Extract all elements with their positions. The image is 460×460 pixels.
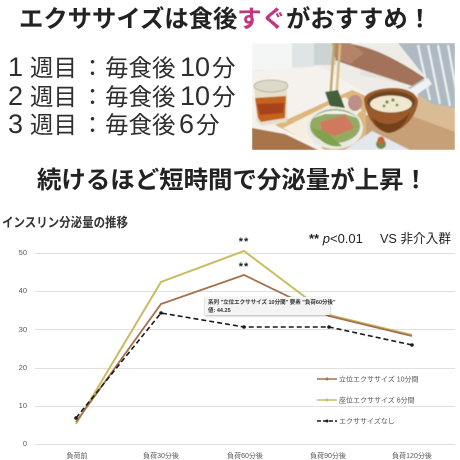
significance asterisks upper: ** — [239, 236, 249, 248]
significance note — [309, 231, 451, 246]
y axis labels: 0 — [23, 439, 27, 448]
tooltip: 系列 "立位エクササイズ 10分間" 要素 "負荷60分後" — [208, 298, 336, 306]
legend: none: エクササイズなし — [339, 416, 395, 426]
chart title: インスリン分泌量の推移 — [2, 215, 128, 230]
legend — [317, 374, 419, 426]
line chart — [19, 236, 455, 460]
significance asterisks lower: ** — [239, 261, 249, 273]
title: エクササイズは食後すぐがおすすめ！ — [19, 5, 432, 33]
subheading: 続けるほど短時間で分泌量が上昇！ — [37, 166, 428, 194]
week 2: 毎食後 — [105, 84, 176, 110]
week 3: 分 — [196, 112, 220, 138]
week 3: 3 — [8, 109, 23, 139]
y axis labels: 30 — [19, 325, 27, 334]
p value: ** p<0.01 — [309, 231, 363, 246]
photo: meal with chopsticks — [252, 43, 456, 150]
y axis labels: 50 — [19, 248, 27, 257]
week 2: 2 — [8, 81, 23, 111]
week 1: 毎食後 — [105, 55, 176, 81]
week 2: ： — [81, 84, 104, 110]
week 2: 週目 — [30, 84, 77, 110]
x axis labels: 負荷120分後 — [392, 451, 432, 460]
tooltip: 値: 44.25 — [208, 306, 231, 314]
series: no exercise — [74, 311, 414, 420]
legend: seated: 座位エクササイズ 6分間 — [339, 396, 415, 404]
week 3: 毎食後 — [105, 112, 176, 138]
x axis labels: 負荷前 — [66, 451, 88, 460]
series: standing exercise 10 min — [76, 275, 412, 422]
week 1 — [8, 52, 236, 82]
y axis labels — [19, 248, 27, 448]
week 3: 週目 — [30, 112, 77, 138]
x axis labels: 負荷60分後 — [227, 451, 263, 460]
x axis labels — [66, 451, 432, 460]
week 1: 分 — [212, 55, 236, 81]
week 1: 1 — [8, 52, 23, 82]
x axis labels: 負荷90分後 — [310, 451, 346, 460]
x axis labels: 負荷30分後 — [143, 451, 179, 460]
week 3: 6 — [179, 109, 194, 139]
week 1: ： — [81, 55, 104, 81]
grid lines — [35, 254, 455, 444]
legend: standing: 立位エクササイズ 10分間 — [339, 374, 419, 384]
y axis labels: 20 — [19, 363, 27, 372]
vs label: VS 非介入群 — [380, 231, 451, 246]
week 2 — [8, 81, 236, 111]
week 1: 10 — [180, 52, 210, 82]
tooltip — [205, 297, 336, 315]
series: seated exercise 6 min — [76, 251, 412, 424]
week 3: ： — [81, 112, 104, 138]
week 2: 分 — [212, 84, 236, 110]
y axis labels: 40 — [19, 286, 27, 295]
week 3 — [8, 109, 220, 139]
week 2: 10 — [180, 81, 210, 111]
y axis labels: 10 — [19, 401, 27, 410]
schedule list — [8, 52, 236, 139]
week 1: 週目 — [30, 55, 77, 81]
